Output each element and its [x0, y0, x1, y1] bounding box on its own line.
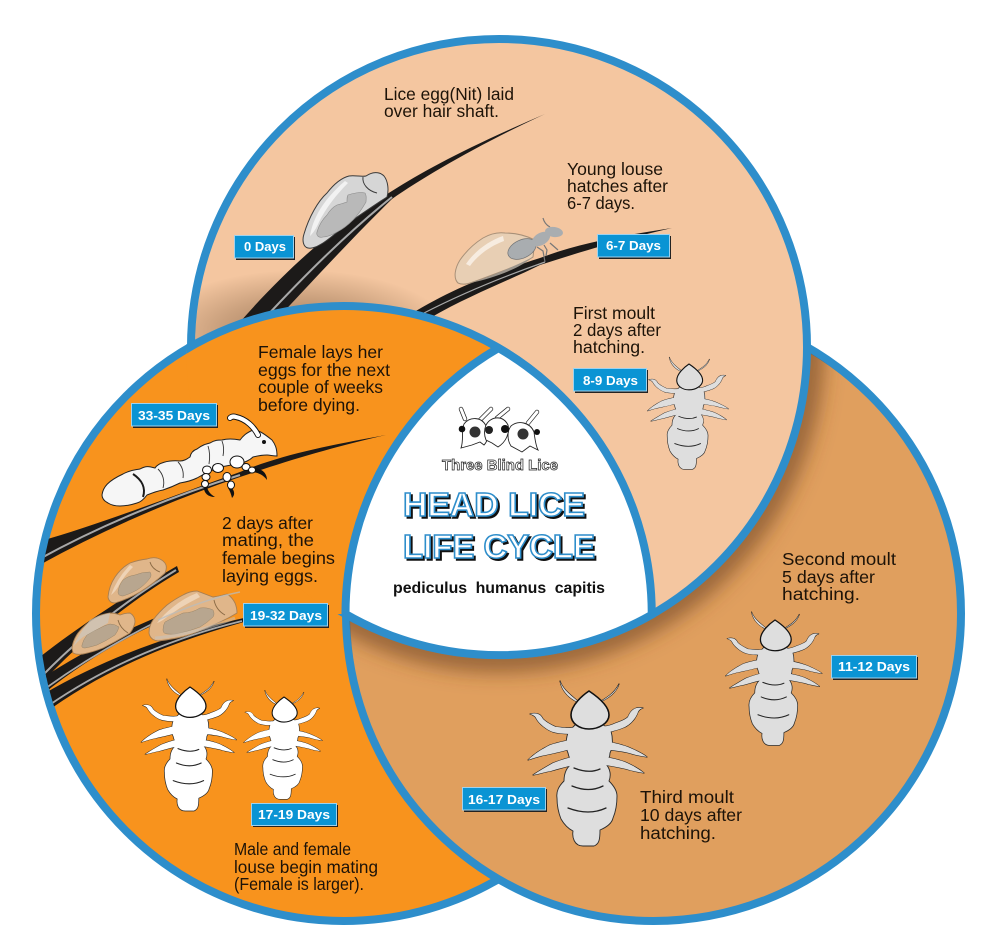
first moult louse: [648, 357, 728, 469]
label: 17-19 Days: 17-19 Days: [258, 807, 330, 822]
shadow cast on top circle by left circle: [195, 276, 422, 340]
hair shaft: 0 days: [240, 114, 545, 322]
text: young louse: hatches after: [567, 176, 668, 196]
text: second moult: hatching.: [782, 584, 860, 604]
label: 11-12 Days: [832, 656, 918, 680]
logo: Three Blind Lice: [442, 409, 558, 474]
text: second moult: Second moult: [782, 549, 896, 569]
egg: large, 19-32 days: [149, 591, 240, 641]
title: HEAD LICE: [403, 486, 585, 523]
text: female lays eggs: Female lays her: [258, 342, 383, 362]
panel: top circle, egg and first moult: [191, 39, 807, 655]
text: first moult: hatching.: [573, 337, 645, 357]
text: lice egg: [384, 84, 514, 121]
male louse: [141, 679, 236, 811]
label: 8-9 Days: [574, 368, 648, 393]
label: 33-35 Days: 33-35 Days: [138, 408, 210, 423]
label: 11-12 Days: 11-12 Days: [838, 659, 910, 674]
logo: Three Blind Lice: Three Blind Lice: [442, 457, 558, 474]
text: after mating: [222, 513, 335, 586]
second moult louse: [726, 612, 822, 746]
text: young louse: Young louse: [567, 159, 663, 179]
text: female lays eggs: couple of weeks: [258, 377, 383, 397]
text: lice egg: Lice egg(Nit) laid: [384, 84, 514, 104]
text: first moult: 2 days after: [573, 320, 661, 340]
text: female lays eggs: [258, 342, 390, 415]
text: lice egg: over hair shaft.: [384, 101, 499, 121]
text: female lays eggs: eggs for the next: [258, 360, 390, 380]
title: HEAD LICE: [405, 488, 587, 525]
label: 8-9 Days: 8-9 Days: [583, 373, 638, 388]
text: after mating: female begins: [222, 548, 335, 568]
text: third moult: Third moult: [640, 787, 734, 807]
panel: left circle overlapping the top circle: [186, 302, 576, 614]
egg: lower left, 19-32 days: [72, 613, 135, 654]
text: mating: louse begin mating: [234, 857, 378, 877]
label: 0 Days: [234, 236, 295, 260]
adult female louse: [102, 417, 277, 506]
label: 16-17 Days: [462, 788, 547, 812]
title: [403, 486, 597, 567]
text: mating: (Female is larger).: [234, 874, 364, 894]
label: 0 Days: 0 Days: [244, 239, 286, 254]
label: 19-32 Days: [244, 604, 329, 628]
text: after mating: laying eggs.: [222, 566, 318, 586]
text: second moult: [782, 549, 896, 604]
text: third moult: 10 days after: [640, 805, 742, 825]
label: 19-32 Days: 19-32 Days: [250, 608, 322, 623]
hair shafts in left circle: [30, 435, 386, 715]
text: after mating: 2 days after: [222, 513, 313, 533]
female louse: [244, 690, 322, 799]
label: 16-17 Days: 16-17 Days: [468, 792, 540, 807]
text: after mating: mating, the: [222, 530, 314, 550]
nit egg: 0 days: [303, 173, 388, 248]
text: first moult: [573, 303, 661, 357]
text: first moult: First moult: [573, 303, 655, 323]
title: LIFE CYCLE: [405, 530, 597, 567]
text: young louse: 6-7 days.: [567, 193, 635, 213]
young louse hatching from egg: [455, 218, 564, 284]
text: mating: Male and female: [234, 839, 351, 859]
panel: right circle, later moults: [346, 306, 961, 921]
panel: left circle, adult stage: [36, 306, 651, 921]
shadow cast on right circle by top circle: [350, 354, 836, 684]
text: female lays eggs: before dying.: [258, 395, 360, 415]
label: 17-19 Days: [252, 804, 338, 827]
text: second moult: 5 days after: [782, 567, 875, 587]
title: LIFE CYCLE: [403, 528, 595, 565]
text: third moult: [640, 787, 742, 843]
panel: centre title area: [345, 348, 652, 655]
label: 6-7 Days: 6-7 Days: [606, 238, 661, 253]
third moult louse: [528, 681, 647, 846]
text: young louse: [567, 159, 668, 213]
egg: upper, 19-32 days: [108, 558, 166, 603]
text: third moult: hatching.: [640, 823, 716, 843]
hair shaft: 6-7 days: [411, 228, 672, 318]
subtitle: pediculus humanus capitis: [393, 580, 605, 597]
label: 33-35 Days: [132, 404, 218, 428]
text: mating: [234, 839, 378, 894]
label: 6-7 Days: [598, 234, 671, 259]
